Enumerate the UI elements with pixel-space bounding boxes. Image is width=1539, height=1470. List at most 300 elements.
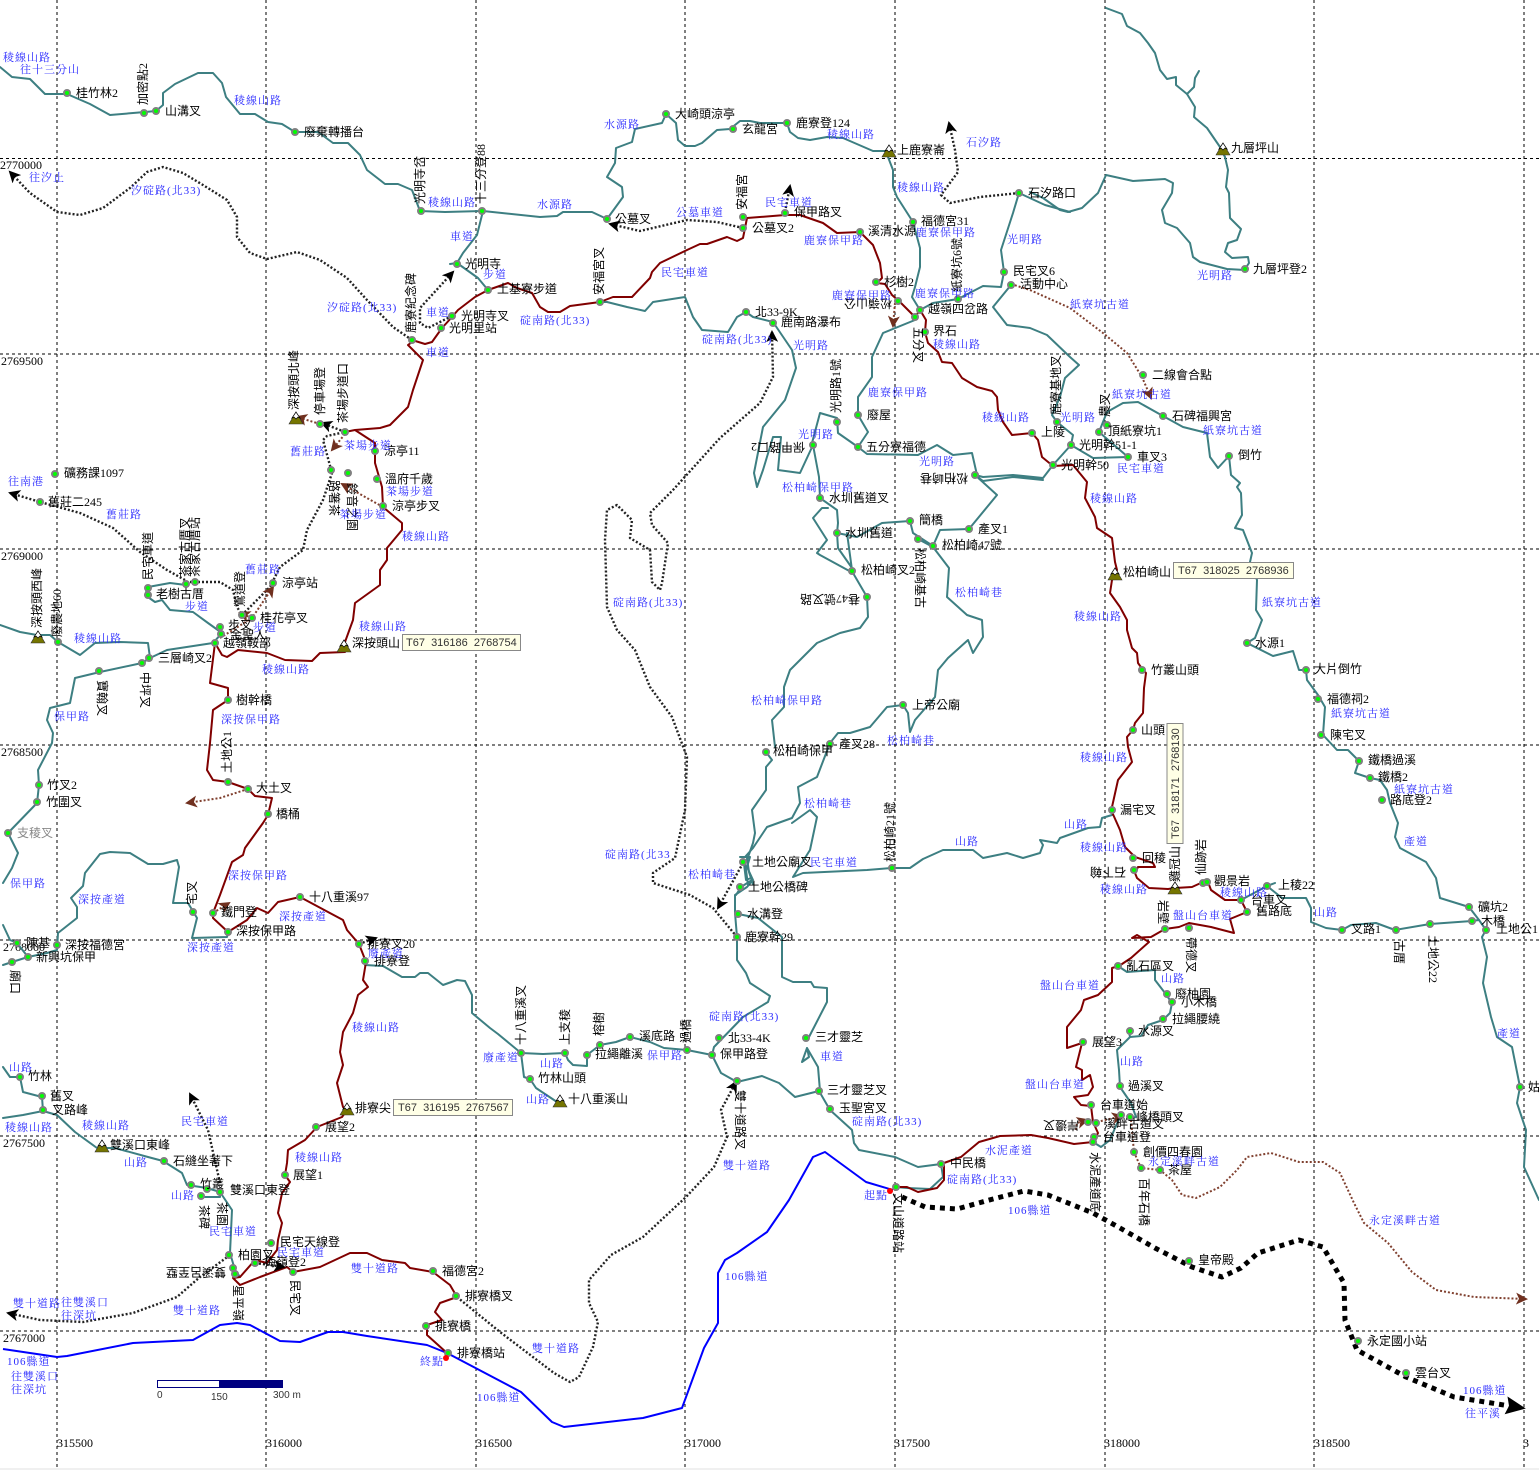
rotated labels reading downward: 中坪叉 bbox=[138, 672, 153, 708]
blue trail-name labels: 稜線山路 bbox=[1074, 609, 1122, 623]
black place-name labels: 鹿寮幹29 bbox=[745, 929, 793, 944]
rotated labels reading upward: 茶場步道口 bbox=[336, 363, 350, 423]
blue trail-name labels: 稜線山路 bbox=[428, 195, 476, 209]
blue trail-name labels: 光明路 bbox=[1197, 268, 1233, 282]
rotated labels reading downward: 路箸茶 bbox=[327, 480, 342, 516]
blue trail-name labels: 廢產道 bbox=[483, 1050, 519, 1064]
blue trail-name labels: 稜線山路 bbox=[1220, 885, 1268, 899]
blue trail-name labels: 終點 bbox=[420, 1354, 444, 1368]
rotated labels reading upward: 宅叉 bbox=[184, 881, 199, 905]
blue trail-name labels: 往雙溪口 bbox=[11, 1369, 59, 1383]
start and end markers bbox=[443, 1188, 893, 1361]
blue trail-name labels: 松柏崎巷 bbox=[955, 585, 1003, 599]
blue trail-name labels: 盤山台車道 bbox=[1173, 908, 1233, 922]
black place-name labels: 桂竹林2 bbox=[76, 85, 118, 100]
black place-name labels: 上稜22 bbox=[1278, 878, 1314, 892]
blue trail-name labels: 山路 bbox=[1120, 1055, 1144, 1068]
callout: Jiguan peak coordinates: T67 318171 2768130 bbox=[1170, 728, 1182, 839]
rotated labels reading downward: 岩壁 bbox=[1156, 900, 1171, 924]
black place-name labels: 十八重溪山 bbox=[568, 1092, 628, 1106]
black place-name labels: 茶屋 bbox=[1168, 1163, 1192, 1177]
blue trail-name labels: 稜線山路 bbox=[5, 1120, 53, 1134]
blue trail-name labels: 106縣道 bbox=[1008, 1203, 1052, 1217]
blue trail-name labels: 鹿寮保甲路 bbox=[915, 286, 975, 300]
rotated labels reading upward: 民宅車道 bbox=[140, 532, 155, 580]
blue trail-name labels: 稜線山路 bbox=[3, 50, 51, 64]
rotated labels reading upward: 鹿寮紀念碑 bbox=[403, 273, 418, 333]
black place-name labels: 舊路底 bbox=[1256, 903, 1292, 918]
blue trail-name labels: 車道 bbox=[820, 1049, 844, 1063]
blue trail-name labels: 光明路 bbox=[793, 338, 829, 352]
black place-name labels: 回稜 bbox=[1142, 851, 1166, 865]
blue trail-name labels: 舊莊路 bbox=[106, 507, 142, 521]
black place-name labels: 產叉1 bbox=[978, 521, 1008, 536]
black place-name labels: 深按保甲路 bbox=[236, 923, 296, 938]
peak icons bbox=[31, 143, 1230, 1152]
black place-name labels: 竹林 bbox=[28, 1069, 52, 1083]
black place-name labels: 大片倒竹 bbox=[1314, 662, 1362, 676]
black place-name labels: 松柏崎山 bbox=[1123, 564, 1171, 579]
upside-down labels: 松嶺山公 bbox=[844, 296, 892, 310]
blue trail-name labels: 茶場步道 bbox=[339, 507, 387, 521]
blue trail-name labels: 民宅車道 bbox=[810, 855, 858, 869]
blue trail-name labels: 車道 bbox=[426, 345, 450, 359]
rotated labels reading downward: 鈴音之園 bbox=[345, 483, 360, 531]
black place-name labels: 涼亭步叉 bbox=[392, 498, 440, 513]
black place-name labels: 漏宅叉 bbox=[1120, 802, 1156, 817]
rotated labels reading downward: 文山道路站 bbox=[891, 1193, 906, 1253]
blue trail-name labels: 茶場步道 bbox=[386, 484, 434, 498]
blue trail-name labels: 光明路 bbox=[1007, 232, 1043, 246]
rotated labels reading upward: 深按頭西峰 bbox=[30, 568, 44, 628]
blue trail-name labels: 稜線山路 bbox=[74, 631, 122, 645]
grid coordinate labels: 2767000 bbox=[3, 1331, 45, 1345]
blue trail-name labels: 碇南路(北33) bbox=[613, 595, 683, 609]
blue trail-name labels: 盤山台車道 bbox=[1025, 1077, 1085, 1091]
black place-name labels: 松柏崎保甲 bbox=[773, 743, 833, 758]
blue trail-name labels: 山路 bbox=[171, 1189, 195, 1202]
blue trail-name labels: 茶場步道 bbox=[344, 438, 392, 452]
blue trail-name labels: 步道 bbox=[185, 599, 209, 613]
black place-name labels: 鹿寮登124 bbox=[796, 115, 850, 130]
blue trail-name labels: 碇南路(北33) bbox=[709, 1009, 779, 1023]
black place-name labels: 展望1 bbox=[293, 1167, 323, 1182]
rotated labels reading upward: 安福宮 bbox=[734, 174, 749, 210]
black place-name labels: 步叉 bbox=[228, 618, 252, 632]
rotated labels reading downward bbox=[8, 327, 1440, 1321]
black place-name labels: 水溝登 bbox=[747, 906, 783, 921]
black place-name labels: 深按福德宮 bbox=[65, 937, 125, 952]
black place-name labels: 石縫坐著下 bbox=[173, 1153, 233, 1168]
blue trail-name labels: 民宅車道 bbox=[181, 1114, 229, 1128]
blue trail-name labels: 石汐路 bbox=[966, 136, 1002, 149]
black place-name labels: 峰橋頭叉 bbox=[1136, 1110, 1184, 1124]
rotated labels reading upward: 仙跡岩 bbox=[1193, 839, 1208, 875]
black place-name labels: 十八重溪97 bbox=[309, 890, 369, 904]
blue trail-name labels: 民宅車道 bbox=[1117, 461, 1165, 475]
rotated labels reading downward: 古厝 bbox=[1392, 940, 1407, 964]
callout: Jiguan peak coordinates bbox=[1167, 724, 1183, 844]
blue trail-name labels: 鹿寮保甲路 bbox=[832, 288, 892, 302]
blue trail-name labels: 水泥產道 bbox=[985, 1143, 1033, 1157]
callout: Paliao peak coordinates: T67 316195 2767567 bbox=[398, 1102, 509, 1114]
rotated labels reading upward: 雞冠山 bbox=[1168, 846, 1182, 882]
black place-name labels: 中民橋 bbox=[950, 1155, 986, 1170]
black place-name labels: 石碑福興宮 bbox=[1172, 408, 1232, 423]
blue trail-name labels: 產道 bbox=[1497, 1026, 1521, 1040]
blue trail-name labels: 汐碇路(北33) bbox=[131, 183, 201, 197]
black place-name labels: 觀景岩 bbox=[1214, 873, 1250, 888]
upside-down labels: 松柏崎巷 bbox=[920, 471, 968, 486]
black place-name labels: 溪清水源 bbox=[868, 224, 916, 238]
black place-name labels: 水源叉 bbox=[1138, 1024, 1174, 1038]
black place-name labels: 土基寮步道 bbox=[497, 281, 557, 296]
callout: Paliao peak coordinates bbox=[394, 1100, 512, 1116]
black place-name labels: 柏園叉 bbox=[238, 1247, 274, 1262]
blue trail-name labels: 山路 bbox=[1314, 906, 1338, 919]
blue trail-name labels: 稜線山路 bbox=[295, 1150, 343, 1164]
scale bar: 150 bbox=[211, 1392, 228, 1403]
rotated labels reading downward: 茶園 bbox=[215, 1202, 229, 1226]
blue trail-name labels: 紙寮坑古道 bbox=[1394, 782, 1454, 796]
maroon main ridge route bbox=[207, 215, 1247, 1353]
black place-name labels: 保甲路登 bbox=[720, 1046, 768, 1061]
rotated labels reading upward: 光明寺岔 bbox=[413, 156, 427, 204]
blue trail-name labels: 山路 bbox=[1064, 818, 1088, 831]
blue trail-name labels: 碇南路(北33) bbox=[947, 1172, 1017, 1186]
black place-name labels: 光明幹50 bbox=[1061, 457, 1109, 472]
black place-name labels: 土地公1 bbox=[1496, 922, 1538, 936]
callout: Songbaiqi peak coordinates bbox=[1174, 562, 1294, 578]
blue trail-name labels: 稜線山路 bbox=[234, 93, 282, 107]
rotated labels reading upward: 廢農地60 bbox=[49, 589, 64, 637]
black place-name labels: 二線會合點 bbox=[1152, 367, 1212, 382]
blue trail-name labels: 紙寮坑古道 bbox=[1262, 595, 1322, 609]
black place-name labels: 排寮橋 bbox=[435, 1318, 471, 1333]
rotated labels reading upward: 上支稜 bbox=[558, 1009, 572, 1045]
black place-name labels: 水圳舊道叉 bbox=[829, 491, 889, 505]
black place-name labels: 展望3 bbox=[1092, 1034, 1122, 1049]
black place-name labels: 鐵橋過溪 bbox=[1368, 752, 1416, 767]
blue trail-name labels: 步道 bbox=[483, 267, 507, 281]
blue trail-name labels: 深按產道 bbox=[78, 892, 126, 906]
black place-name labels: 叉路峰 bbox=[52, 1102, 88, 1117]
blue trail-name labels: 稜線山路 bbox=[1080, 840, 1128, 854]
blue trail-name labels: 起點 bbox=[864, 1188, 888, 1202]
blue trail-name labels: 永定溪畔古道 bbox=[1148, 1154, 1220, 1168]
blue trail-name labels: 稜線山路 bbox=[827, 127, 875, 141]
black place-name labels: 竹叉2 bbox=[47, 778, 77, 792]
black place-name labels: 創價四春園 bbox=[1143, 1145, 1203, 1159]
black place-name labels: 展望2 bbox=[325, 1119, 355, 1134]
upside-down labels: 保甲路口2 bbox=[751, 440, 805, 455]
blue trail-name labels: 稜線山路 bbox=[402, 529, 450, 543]
black place-name labels: 松柏崎47號 bbox=[942, 537, 1002, 552]
upside-down labels bbox=[166, 296, 1126, 1279]
blue trail-name labels: 松柏崎保甲路 bbox=[751, 693, 823, 707]
blue trail-name labels: 碇南路(北33) bbox=[520, 313, 590, 327]
blue trail-name labels: 稜線山路 bbox=[262, 662, 310, 676]
black place-name labels: 水圳舊道 bbox=[845, 526, 893, 540]
grid coordinate labels: 317000 bbox=[685, 1436, 721, 1450]
grid coordinate labels: 2768000 bbox=[3, 940, 45, 954]
upside-down labels: 岸邊叉 bbox=[1043, 1118, 1079, 1132]
black place-name labels: 叉路1 bbox=[1351, 921, 1381, 936]
blue trail-name labels: 民宅車道 bbox=[661, 265, 709, 279]
black place-name labels: 廢屋 bbox=[867, 407, 891, 422]
black place-name labels: 台車道始 bbox=[1100, 1097, 1148, 1112]
blue trail-name labels: 松柏崎巷 bbox=[804, 796, 852, 810]
black place-name labels: 陳基 bbox=[26, 936, 50, 950]
rotated labels reading upward: 加密點2 bbox=[135, 63, 150, 105]
blue trail-name labels: 往南港 bbox=[8, 474, 44, 488]
black place-name labels: 三才靈芝叉 bbox=[827, 1083, 887, 1097]
black place-name labels: 舊叉 bbox=[50, 1089, 74, 1103]
upside-down labels: 巷47號叉路 bbox=[800, 592, 860, 607]
black place-name labels: 簡橋 bbox=[919, 512, 943, 527]
bottom edge strip bbox=[0, 1468, 1539, 1470]
blue trail-name labels: 山路 bbox=[540, 1057, 564, 1070]
blue trail-name labels: 舊莊路 bbox=[290, 444, 326, 458]
black place-name labels: 過溪叉 bbox=[1128, 1078, 1164, 1093]
black place-name labels: 土地公廟叉 bbox=[752, 854, 812, 869]
blue trail-name labels: 稜線山路 bbox=[982, 410, 1030, 424]
blue trail-name labels: 光明路 bbox=[1060, 410, 1096, 424]
black place-name labels: 新興坑保甲 bbox=[36, 949, 96, 964]
black dotted road links and arrows bbox=[8, 123, 1019, 1382]
black place-name labels: 舊莊二245 bbox=[48, 495, 102, 509]
blue trail-name labels: 產道 bbox=[1404, 834, 1428, 848]
blue trail-name labels: 稜線山路 bbox=[933, 337, 981, 351]
grid coordinate labels: 2769500 bbox=[1, 354, 43, 368]
black place-name labels: 山頭 bbox=[1141, 723, 1165, 737]
rotated labels reading upward: 農叉 bbox=[1098, 393, 1112, 417]
blue trail-name labels: 往汐止 bbox=[29, 170, 65, 184]
blue trail-name labels: 山路 bbox=[955, 835, 979, 848]
blue trail-name labels: 山路 bbox=[124, 1156, 148, 1169]
rotated labels reading upward: 十八重溪叉 bbox=[514, 985, 528, 1045]
upside-down labels: 雙溪呂至墅 bbox=[166, 1265, 226, 1279]
black place-name labels: 梅嶺登2 bbox=[264, 1254, 306, 1269]
black place-name labels: 北33-4K bbox=[728, 1031, 771, 1045]
black place-name labels: 廢柚園 bbox=[1175, 986, 1211, 1001]
black place-name labels: 倒竹 bbox=[1238, 448, 1262, 462]
black place-name labels: 石汐路口 bbox=[1028, 185, 1076, 200]
blue trail-name labels: 松柏崎巷 bbox=[688, 867, 736, 881]
blue trail-name labels: 紙寮坑古道 bbox=[1070, 297, 1130, 311]
black place-name labels: 排寮登 bbox=[374, 953, 410, 968]
black place-name labels: 小木橋 bbox=[1181, 995, 1217, 1009]
blue trail-name labels: 光明路 bbox=[798, 427, 834, 441]
blue trail-name labels: 車道 bbox=[450, 229, 474, 243]
rotated labels reading upward: 鹿寮基地叉 bbox=[1048, 355, 1063, 415]
black place-name labels: 竹圍叉 bbox=[46, 795, 82, 809]
blue trail-name labels: 稜線山路 bbox=[1100, 882, 1148, 896]
black place-name labels: 木橋 bbox=[1481, 914, 1505, 928]
black place-name labels: 光明里站 bbox=[449, 321, 497, 335]
rotated labels reading upward: 茶家古厝站 bbox=[187, 517, 202, 577]
black place-name labels: 民宅天線登 bbox=[280, 1234, 340, 1249]
blue trail-name labels: 106縣道 bbox=[1463, 1383, 1506, 1397]
blue trail-name labels: 車道 bbox=[426, 305, 450, 319]
blue trail-name labels: 106縣道 bbox=[7, 1354, 50, 1368]
blue trail-name labels: 深按保甲路 bbox=[228, 868, 288, 882]
blue trail-name labels: 鹿寮保甲路 bbox=[868, 385, 928, 399]
blue trail-name labels: 鹿寮保甲路 bbox=[804, 233, 864, 247]
blue trail-name labels: 碇南路(北33) bbox=[852, 1114, 922, 1128]
blue trail-name labels: 水源路 bbox=[537, 197, 573, 211]
blue trail-name labels: 汐碇路(北33) bbox=[327, 300, 397, 314]
black place-name labels: 支稜叉 bbox=[17, 826, 53, 840]
black place-name labels: 民宅叉6 bbox=[1013, 263, 1055, 278]
black place-name labels: 金聖人 bbox=[230, 627, 266, 642]
black place-name labels: 三層崎叉2 bbox=[158, 651, 212, 665]
black place-name labels: 永定國小站 bbox=[1367, 1333, 1427, 1348]
callout: Songbaiqi peak coordinates: T67 318025 2768936 bbox=[1178, 565, 1289, 577]
blue trail-name labels: 保甲路 bbox=[54, 710, 90, 723]
blue trail-name labels: 稜線山路 bbox=[897, 180, 945, 194]
blue trail-name labels: 舊莊路 bbox=[245, 562, 281, 576]
blue trail-name labels: 往深坑 bbox=[61, 1308, 97, 1322]
black place-name labels: 路底登2 bbox=[1390, 792, 1432, 807]
black place-name labels: 雙溪口東登 bbox=[230, 1182, 290, 1197]
black place-name labels: 亂石區叉 bbox=[1126, 959, 1174, 973]
blue trail-name labels: 往深坑 bbox=[11, 1382, 47, 1396]
rotated labels reading upward: 十三分登88 bbox=[473, 144, 488, 204]
blue trail-name labels: 106縣道 bbox=[477, 1390, 520, 1404]
black place-name labels: 福德祠2 bbox=[1327, 691, 1369, 706]
rotated labels reading downward: 百年石橋 bbox=[1137, 1178, 1151, 1226]
blue trail-name labels: 稜線山路 bbox=[1080, 750, 1128, 764]
brown dotted old trails and arrows bbox=[187, 284, 1526, 1299]
black place-name labels: 拉繩離溪 bbox=[595, 1046, 643, 1061]
blue trail-name labels: 步道 bbox=[253, 620, 277, 634]
blue trail-name labels: 鹿寮保甲路 bbox=[916, 225, 976, 239]
black place-name labels: 玉聖宮叉 bbox=[839, 1100, 887, 1115]
blue trail-name labels: 光明路 bbox=[919, 454, 955, 468]
rotated labels reading downward: 茶碑 bbox=[197, 1205, 212, 1229]
scale bar bbox=[157, 1380, 301, 1403]
black place-name labels: 大土叉 bbox=[256, 781, 292, 795]
blue trail-name labels: 稜線山路 bbox=[352, 1020, 400, 1034]
blue trail-name labels: 松柏崎巷 bbox=[887, 733, 935, 747]
blue trail-name labels: 往雙溪口 bbox=[61, 1295, 109, 1309]
rotated labels reading downward: 土地公22 bbox=[1426, 935, 1440, 983]
grid coordinate labels: 3 bbox=[1523, 1436, 1529, 1450]
black place-name labels: 竹叢山頭 bbox=[1151, 663, 1199, 677]
black place-name labels: 涼亭站 bbox=[282, 575, 318, 590]
black place-name labels: 溪底路 bbox=[639, 1028, 675, 1043]
black place-name labels: 車叉3 bbox=[1137, 450, 1167, 464]
rotated labels reading upward: 過橋 bbox=[678, 1019, 693, 1043]
rotated labels reading upward: 鶯道登 bbox=[232, 571, 247, 607]
grid coordinate labels: 2768500 bbox=[1, 745, 43, 759]
black place-name labels: 老樹古厝 bbox=[156, 586, 204, 601]
blue trail-name labels: 雙十道路 bbox=[723, 1158, 771, 1172]
rotated labels reading upward: 茶家古厝叉 bbox=[177, 517, 192, 577]
black place-name labels: 鐵門登 bbox=[221, 904, 257, 919]
black place-name labels: 皇帝殿 bbox=[1198, 1252, 1234, 1267]
blue trail-name labels: 深按保甲路 bbox=[221, 712, 281, 726]
black place-name labels: 光明寺 bbox=[465, 257, 501, 271]
black place-name labels: 公墓叉 bbox=[615, 212, 651, 226]
scale bar: 300 m bbox=[273, 1390, 301, 1401]
black place-name labels: 頂紙寮坑1 bbox=[1108, 423, 1162, 438]
blue trail-name labels: 深按產道 bbox=[187, 940, 235, 954]
blue trail-name labels: 106縣道 bbox=[725, 1269, 768, 1283]
black place-name labels: 九層坪登2 bbox=[1253, 261, 1307, 276]
blue trail-name labels: 紙寮坑古道 bbox=[1112, 387, 1172, 401]
black place-name labels: 涼亭11 bbox=[384, 443, 420, 458]
rotated labels reading downward: 帶德叉 bbox=[1184, 937, 1199, 973]
black place-name labels: 松柏崎叉2 bbox=[861, 562, 915, 577]
black place-name labels: 上帝公廟 bbox=[912, 697, 960, 712]
blue trail-name labels: 雙十道路 bbox=[173, 1303, 221, 1317]
black place-name labels: 福德宮31 bbox=[921, 213, 969, 228]
blue trail-name labels: 稜線山路 bbox=[1090, 491, 1138, 505]
black place-name labels: 杉樹2 bbox=[884, 275, 914, 289]
black place-name labels: 福德宮2 bbox=[442, 1263, 484, 1278]
grid coordinate labels: 317500 bbox=[894, 1436, 930, 1450]
blue trail-name labels: 山路 bbox=[1161, 972, 1185, 985]
grid coordinate labels: 316000 bbox=[266, 1436, 302, 1450]
rotated labels reading upward: 停車場登 bbox=[312, 367, 327, 415]
rotated labels reading downward: 雙十道路叉 bbox=[733, 1090, 748, 1150]
grid coordinate labels: 2770000 bbox=[0, 158, 42, 172]
black place-name labels: 溪畔古道叉 bbox=[1104, 1116, 1164, 1131]
rotated labels reading downward: 星平嶺 bbox=[231, 1285, 245, 1321]
blue trail-name labels: 盤山台車道 bbox=[1040, 978, 1100, 992]
road: county road 106 bbox=[3, 1152, 893, 1427]
blue trail-name labels: 深按產道 bbox=[279, 909, 327, 923]
blue trail-name labels: 稜線山路 bbox=[359, 619, 407, 633]
black place-name labels: 鹿南路瀑布 bbox=[781, 314, 841, 329]
rotated labels reading upward bbox=[30, 63, 1208, 1045]
blue trail-name labels: 往十三分山 bbox=[20, 62, 80, 76]
blue trail-name labels: 雙十道路 bbox=[13, 1296, 61, 1310]
rotated labels reading downward: 民宅叉 bbox=[288, 1280, 303, 1316]
blue trail-name labels: 保甲路 bbox=[10, 877, 46, 890]
black place-name labels: 上鹿寮崙 bbox=[897, 142, 945, 157]
black place-name labels: 深按頭山 bbox=[352, 636, 400, 650]
black place-name labels: 土地公橋碑 bbox=[748, 879, 808, 894]
black place-name labels: 排寮橋叉 bbox=[465, 1288, 513, 1303]
blue trail-name labels: 山路 bbox=[9, 1061, 33, 1074]
blue trail-name labels: 碇南路(北33) bbox=[702, 332, 772, 346]
grid coordinate labels: 316500 bbox=[476, 1436, 512, 1450]
rotated labels reading upward: 深按頭北峰 bbox=[287, 350, 301, 410]
grid coordinate labels: 2767500 bbox=[3, 1136, 45, 1150]
blue trail-name labels: 紙寮坑古道 bbox=[1203, 423, 1263, 437]
black place-name labels: 排寮叉20 bbox=[367, 936, 415, 951]
blue trail-name labels: 碇南路(北33 bbox=[605, 847, 671, 861]
rotated labels reading downward: 松柏崎基古 bbox=[913, 548, 928, 608]
blue trail-name labels: 永定溪畔古道 bbox=[1369, 1213, 1441, 1227]
black place-name labels: 界石 bbox=[933, 324, 957, 338]
black place-name labels: 橋桶 bbox=[276, 806, 300, 821]
black place-name labels: 五分寮福德 bbox=[866, 439, 926, 454]
rotated labels reading downward: 寶翰叉 bbox=[95, 680, 110, 716]
blue trail-name labels: 民宅車道 bbox=[209, 1224, 257, 1238]
blue trail-name labels: 雙十道路 bbox=[532, 1341, 580, 1355]
black place-name labels: 拉繩腰繞 bbox=[1172, 1011, 1220, 1026]
rotated labels reading upward: 榕樹 bbox=[591, 1012, 606, 1036]
blue trail-name labels: 紙寮坑古道 bbox=[1331, 706, 1391, 720]
blue trail-name labels: 保甲路 bbox=[647, 1049, 683, 1062]
grid coordinate labels: 2769000 bbox=[1, 549, 43, 563]
black place-name labels: 溫府千歲 bbox=[385, 471, 433, 486]
blue trail-name labels: 民宅車道 bbox=[277, 1245, 325, 1259]
